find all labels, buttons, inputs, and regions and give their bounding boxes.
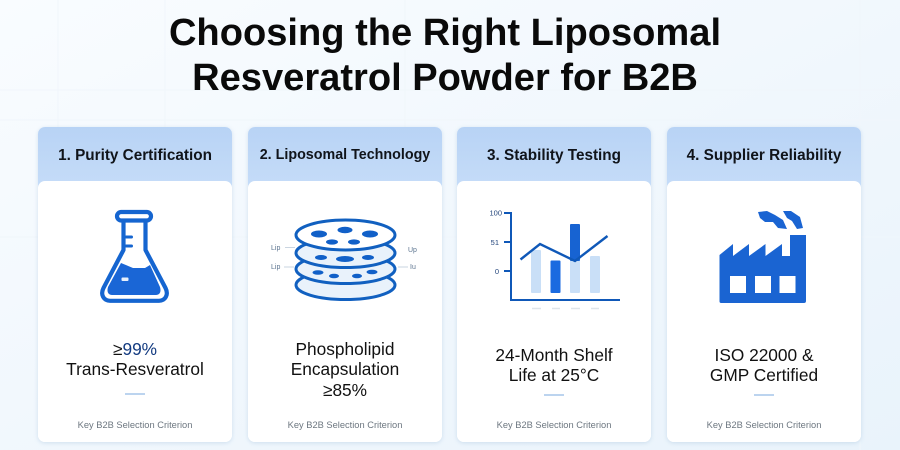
panel: stability testing bbox=[457, 127, 651, 442]
heading: supplier reliability bbox=[667, 127, 861, 187]
footer text: Key B2B Selection Criterion bbox=[707, 420, 821, 430]
icon: liposome layers bbox=[271, 218, 417, 301]
heading: stability testing: 3. Stability Testing bbox=[487, 147, 621, 164]
accent rule bbox=[544, 394, 564, 396]
panel body: stability testing bbox=[457, 181, 651, 442]
heading: liposomal technology: 2. Liposomal Technology bbox=[260, 147, 430, 163]
value text: 24-Month Shelf bbox=[495, 345, 613, 365]
value text: ≥99% bbox=[113, 339, 157, 359]
panel: supplier reliability bbox=[667, 127, 861, 442]
value text bbox=[710, 345, 818, 385]
value text: ISO 22000 & bbox=[715, 345, 813, 365]
value text: Life at 25°C bbox=[509, 365, 599, 385]
footer text: Key B2B Selection Criterion bbox=[497, 420, 611, 430]
panel: liposomal technology bbox=[248, 127, 442, 442]
footer text: Key B2B Selection Criterion bbox=[288, 420, 402, 430]
panel body: liposomal technology bbox=[248, 181, 442, 442]
heading: purity certification bbox=[38, 127, 232, 187]
panel: purity certification bbox=[38, 127, 232, 442]
value text: Phospholipid bbox=[296, 339, 394, 359]
icon: stability chart bbox=[489, 208, 620, 310]
value text bbox=[291, 339, 399, 400]
title: Resveratrol Powder for B2B bbox=[192, 57, 698, 99]
icon: stability chart: 100 bbox=[489, 208, 502, 218]
title bbox=[169, 12, 721, 99]
heading: purity certification: 1. Purity Certification bbox=[58, 147, 212, 164]
title: Choosing the Right Liposomal bbox=[169, 12, 721, 54]
value text bbox=[66, 339, 204, 379]
value text: GMP Certified bbox=[710, 365, 818, 385]
icon: factory bbox=[720, 211, 806, 303]
value text: ≥85% bbox=[323, 380, 367, 400]
accent rule bbox=[125, 393, 145, 395]
panel body: purity certification bbox=[38, 181, 232, 442]
value text: Trans-Resveratrol bbox=[66, 359, 204, 379]
icon: liposome layers: Up bbox=[408, 247, 417, 254]
value text bbox=[495, 345, 613, 385]
icon: stability chart: 0 bbox=[495, 267, 499, 276]
heading: liposomal technology bbox=[248, 127, 442, 187]
icon: liposome layers: Lip bbox=[271, 264, 280, 271]
heading: stability testing bbox=[457, 127, 651, 187]
value text: Encapsulation bbox=[291, 359, 399, 379]
footer text: Key B2B Selection Criterion bbox=[78, 420, 192, 430]
icon: liposome layers: Iu bbox=[410, 264, 416, 271]
accent rule bbox=[754, 394, 774, 396]
icon: stability chart: 51 bbox=[491, 238, 499, 247]
icon: flask bbox=[100, 210, 169, 303]
icon: liposome layers: Lip bbox=[271, 245, 280, 252]
heading: supplier reliability: 4. Supplier Reliability bbox=[687, 147, 841, 164]
panel body: supplier reliability bbox=[667, 181, 861, 442]
